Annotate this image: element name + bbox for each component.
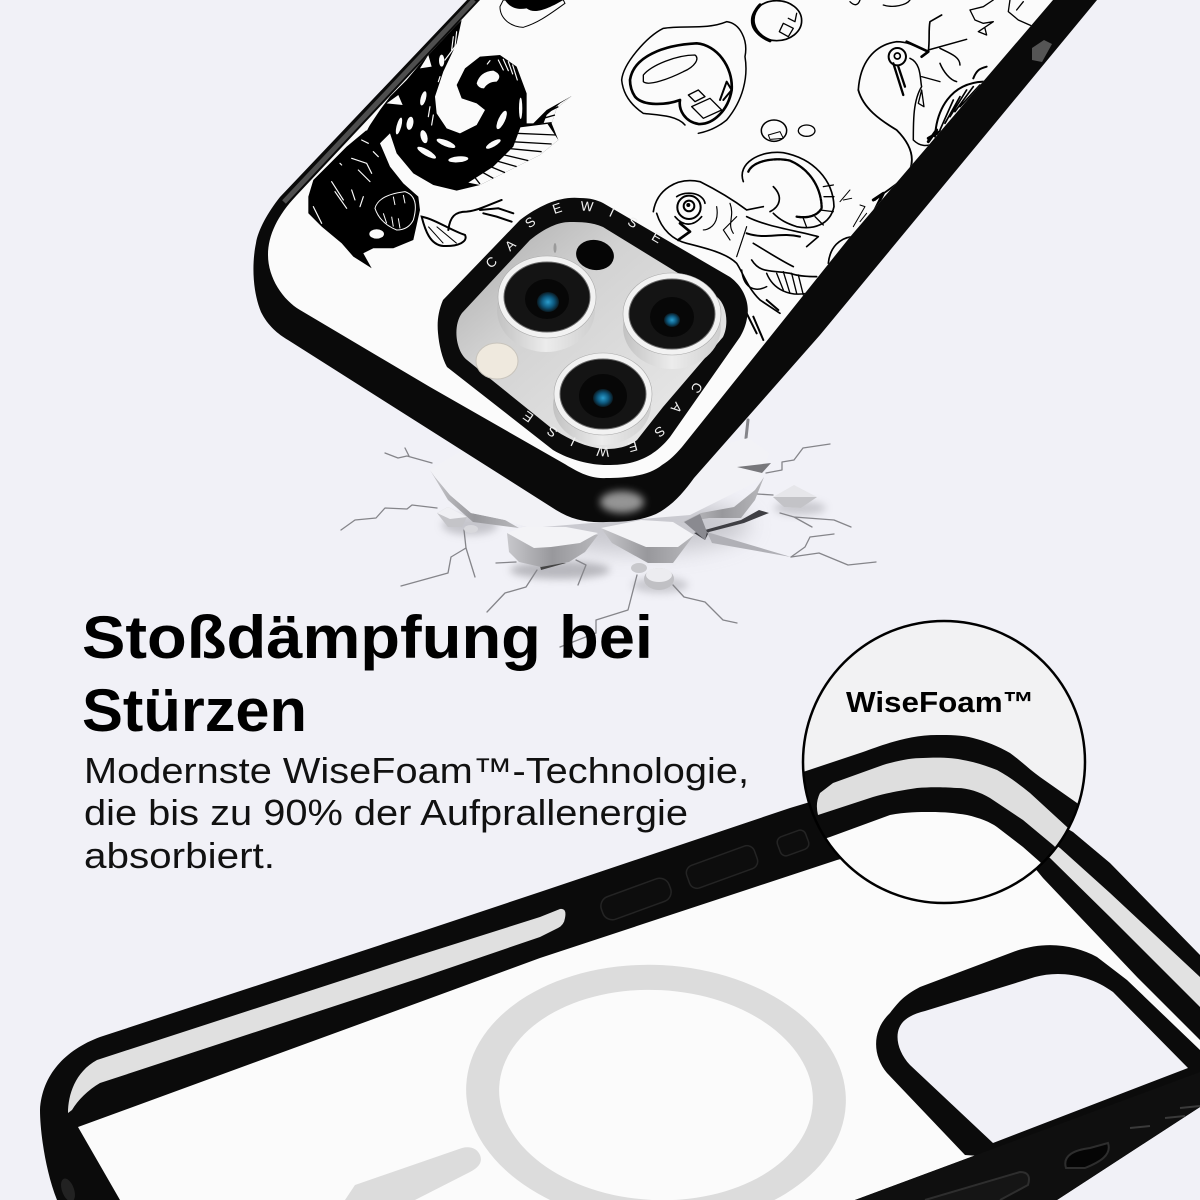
- CASEWISE ring lettering bottom: S: [651, 423, 668, 440]
- camera cutout: [898, 974, 1188, 1143]
- bumper glare: [600, 491, 644, 513]
- clear back interior: [78, 830, 1200, 1200]
- magnifier outline: [803, 621, 1085, 903]
- body text: Modernste WiseFoam™-Technologie,: [84, 750, 749, 791]
- case back: [268, 0, 1053, 478]
- left gap strip: [68, 909, 565, 1113]
- bottom phone inner case view: [40, 760, 1200, 1200]
- CASEWISE ring lettering bottom: [520, 379, 706, 460]
- CASEWISE ring lettering top: C: [483, 253, 500, 271]
- centre left chunk: [507, 533, 598, 567]
- CASEWISE ring lettering top: A: [502, 237, 519, 254]
- CASEWISE ring lettering bottom: S: [544, 423, 560, 440]
- illustration: blobs, tentacles and octopus line art: [622, 0, 1033, 340]
- magnifier label: WiseFoam™: [846, 687, 1034, 719]
- top phone with printed case: [253, 0, 1097, 522]
- left charging hole: [58, 1177, 78, 1200]
- bottom band: [855, 1072, 1200, 1200]
- lens top-right: [623, 273, 721, 369]
- CASEWISE ring lettering top: E: [551, 200, 564, 217]
- dark crack under chunk: [540, 562, 566, 570]
- side button highlight: [1032, 40, 1052, 62]
- heading: Stürzen: [82, 677, 307, 744]
- camera island: [438, 198, 748, 465]
- CASEWISE ring lettering bottom: E: [520, 408, 536, 425]
- phone bumper: [253, 0, 1097, 522]
- heading: [82, 604, 653, 744]
- cracked ground impact: [341, 420, 876, 647]
- flash: [476, 343, 518, 379]
- centre right chunk: [601, 528, 694, 563]
- right gap strip: [1020, 835, 1200, 1007]
- camera window: [456, 222, 726, 449]
- lens top-left: [497, 256, 596, 352]
- CASEWISE ring lettering top: S: [522, 214, 538, 231]
- CASEWISE ring lettering bottom: A: [668, 399, 685, 416]
- CASEWISE ring lettering bottom: I: [568, 434, 578, 449]
- WiseFoam magnifier callout: [802, 620, 1086, 904]
- case frame: [40, 760, 1200, 1200]
- microphone hole: [574, 237, 616, 273]
- body text: die bis zu 90% der Aufprallenergie: [84, 792, 688, 833]
- body text: absorbiert.: [84, 835, 275, 876]
- side buttons: [598, 828, 811, 923]
- bumper edge highlight: [284, 0, 474, 202]
- CASEWISE ring lettering bottom: C: [688, 379, 706, 396]
- magsafe stem: [345, 1147, 481, 1200]
- body text: [84, 750, 749, 876]
- small mic dot: [554, 243, 556, 253]
- illustration: black serpent creature: [308, 0, 572, 268]
- CASEWISE ring lettering top: W: [580, 198, 594, 215]
- small left rocks: [437, 507, 467, 527]
- heading: Stoßdämpfung bei: [82, 604, 653, 671]
- CASEWISE ring lettering top: S: [625, 214, 640, 231]
- right rock: [773, 485, 817, 508]
- magnified corner of the case: [804, 735, 1078, 868]
- camera cutout frame: [876, 945, 1200, 1160]
- CASEWISE ring lettering top: I: [607, 205, 617, 220]
- lens bottom: [553, 353, 652, 445]
- CASEWISE ring lettering bottom: E: [627, 438, 639, 455]
- bottom port details: [925, 1106, 1200, 1200]
- CASEWISE ring lettering top: E: [649, 229, 664, 246]
- CASEWISE ring lettering top: [483, 198, 664, 271]
- CASEWISE ring lettering bottom: W: [596, 443, 610, 460]
- magsafe ring: [459, 955, 853, 1200]
